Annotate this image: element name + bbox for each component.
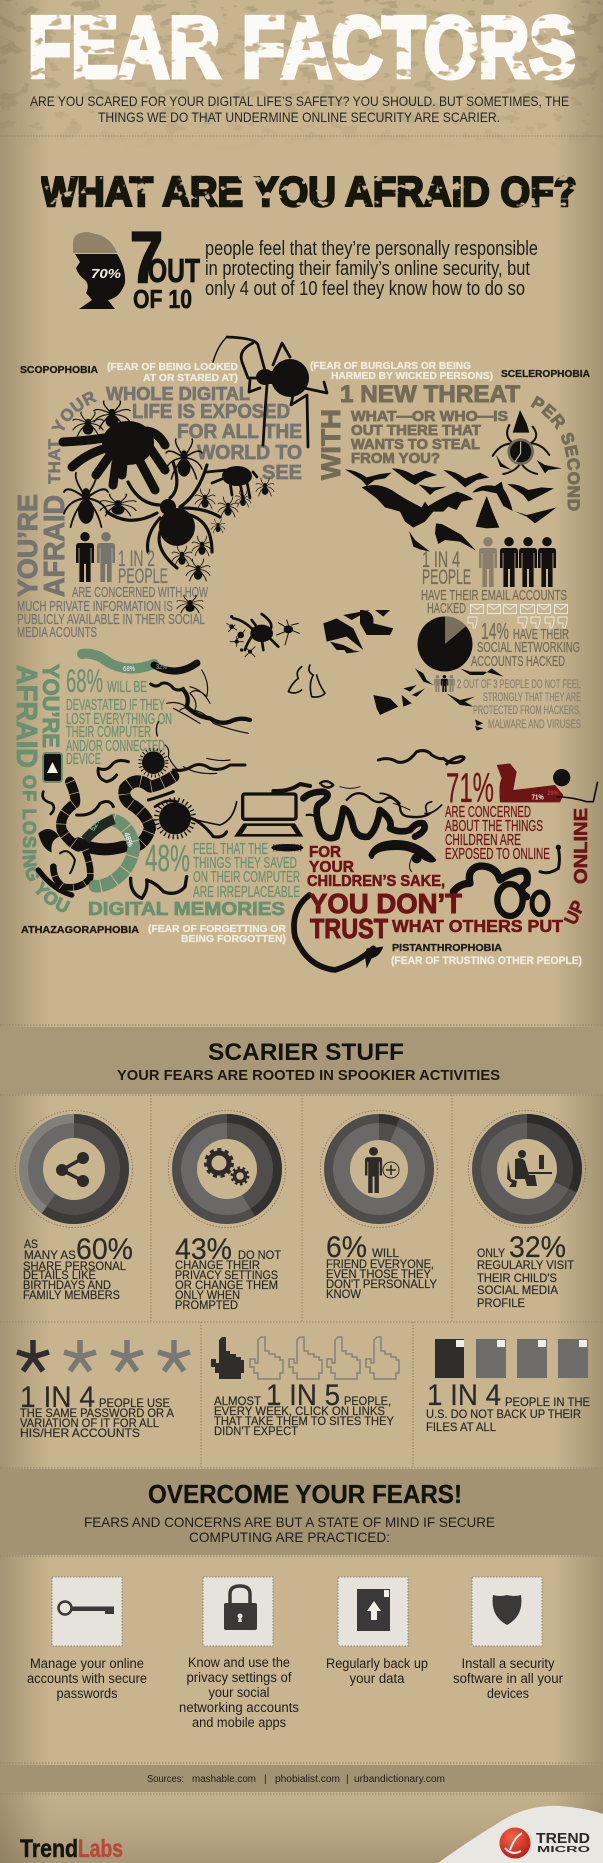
panel: pistanthrophobia <box>294 751 598 970</box>
statistic: email accounts hacked: 1 IN 4 <box>422 547 460 572</box>
heading: SCARIER STUFF <box>208 1039 404 1066</box>
bats <box>345 455 562 552</box>
small spiders <box>172 478 274 581</box>
statistic: 48%: ARE IRREPLACEABLE <box>193 884 300 901</box>
vertical headline: YOU’RE <box>12 494 43 597</box>
wordmark: MICRO <box>537 1845 590 1854</box>
eye: spider cluster <box>227 614 299 657</box>
panel: 1 in 5 click links <box>211 1337 399 1438</box>
statistic text <box>23 1233 133 1302</box>
phobia label <box>310 360 590 382</box>
panel: 7 out of 10 <box>73 218 538 314</box>
phobia label: (FEAR OF BURGLARS OR BEING <box>310 360 471 372</box>
statistic text: BIRTHDAYS AND <box>23 1278 111 1292</box>
tip: back up data <box>326 1577 428 1686</box>
tarantula <box>63 401 165 490</box>
source list: urbandictionary.com <box>354 1774 445 1785</box>
snakes <box>294 751 598 970</box>
subheading: COMPUTING ARE PRACTICED: <box>189 1529 390 1545</box>
icon: person at desk <box>507 1150 552 1187</box>
vertical headline: YOU’RE <box>38 664 64 748</box>
icon: key <box>52 1577 122 1646</box>
phobia label: SCOPOPHOBIA <box>20 364 98 376</box>
snake chart: 48% <box>85 815 136 886</box>
donut chart: 32% <box>468 1110 586 1228</box>
panel: scarier stuff header <box>0 1025 603 1095</box>
phobia label <box>21 923 286 945</box>
statistic text: WILL <box>372 1246 399 1260</box>
panel: 1 in 4 same password <box>17 1340 190 1440</box>
statistic: 48% <box>145 838 300 901</box>
statistic text: 1 IN 4 <box>20 1381 95 1414</box>
tip text: software in all your <box>453 1671 563 1686</box>
curved headline: WITH <box>316 409 346 480</box>
statistic text: AS <box>24 1237 38 1251</box>
subheading: FEARS AND CONCERNS ARE BUT A STATE OF MIND IF SECURE <box>84 1514 495 1530</box>
medium spiders <box>64 439 257 527</box>
statistic: 71% <box>445 764 550 863</box>
phobia label: PISTANTHROPHOBIA <box>392 942 502 954</box>
donut chart: 43% <box>168 1110 286 1228</box>
statistic text: MANY AS <box>24 1248 76 1262</box>
headline: you don't trust: UP <box>560 897 589 928</box>
headline: you don't trust: ONLINE <box>570 808 591 884</box>
tip text <box>27 1656 147 1701</box>
statistic text: REGULARLY VISIT <box>477 1258 575 1272</box>
source list: mashable.com <box>192 1774 256 1785</box>
vertical headline: DIGITAL MEMORIES <box>88 899 285 919</box>
phobia label: (FEAR OF FORGETTING OR <box>148 923 286 935</box>
people icons: 2 out of 3 <box>434 675 455 692</box>
statistic: 71%: 71% <box>446 764 494 811</box>
statistic text: FRIEND EVERYONE, <box>326 1257 434 1271</box>
source list <box>147 1774 445 1785</box>
statistic 7 out of 10: OUT <box>148 252 200 289</box>
subheading: YOUR FEARS ARE ROOTED IN SPOOKIER ACTIVITIES <box>117 1067 500 1084</box>
statistic text: VARIATION OF IT FOR ALL <box>20 1416 159 1430</box>
tip: secure passwords <box>27 1577 147 1701</box>
statistic: social accounts hacked <box>471 618 580 670</box>
statistic text: 60% <box>76 1233 133 1266</box>
statistic: 48%: FEEL THAT THE <box>193 841 268 858</box>
vertical headline: AFRAID <box>10 665 42 768</box>
snakes and worms <box>38 670 310 898</box>
statistic text: THEIR CHILD'S <box>477 1271 557 1285</box>
question text <box>351 408 508 467</box>
tip text: Regularly back up <box>326 1656 428 1671</box>
bats and biohazard clock <box>345 410 562 552</box>
statistic text: DIDN'T EXPECT <box>214 1424 299 1438</box>
statistic: 1 in 2 people: ARE CONCERNED WITH HOW <box>72 585 208 601</box>
intro text: THINGS WE DO THAT UNDERMINE ONLINE SECURITY ARE SCARIER. <box>98 109 500 125</box>
eye: bat cluster <box>323 610 393 653</box>
statistic text <box>214 1379 394 1438</box>
tip text <box>453 1656 563 1701</box>
statistic text: FAMILY MEMBERS <box>23 1288 120 1302</box>
phobia label <box>391 942 582 967</box>
icon: laptop <box>234 784 310 837</box>
statistic text <box>426 1379 590 1434</box>
hanging spider <box>213 337 327 447</box>
statistic text: OR CHANGE THEM <box>175 1278 278 1292</box>
phobia label <box>20 361 238 384</box>
snake chart: 48%: 48% <box>122 831 136 848</box>
blob worm head <box>38 829 59 853</box>
snake chart: 68%: 68% <box>123 666 135 673</box>
statistic text <box>175 1233 282 1312</box>
statistic text: 43% <box>175 1233 232 1266</box>
statistic text: ONLY <box>477 1246 505 1260</box>
icons: documents <box>435 1339 588 1378</box>
headline: you don't trust: WHAT OTHERS PUT <box>392 916 563 936</box>
statistic: 2 out of 3 <box>457 677 581 731</box>
phobia label: AT OR STARED AT) <box>143 372 238 384</box>
logo: Trend Micro <box>438 1806 603 1863</box>
statistic: 71%: CHILDREN ARE <box>445 832 521 849</box>
panel: 32% visit child's profile <box>468 1110 586 1310</box>
icon: man carrying bag: 70% <box>91 266 121 281</box>
statistic text: PEOPLE IN THE <box>505 1395 590 1409</box>
statistic text: PEOPLE USE <box>99 1396 170 1410</box>
icon: child lying with laptop: 29% <box>547 790 559 797</box>
statistic: 1 in 2 people: PUBLICLY AVAILABLE IN THEIR SOCIAL <box>17 612 205 628</box>
logo: TrendLabs <box>20 1835 123 1863</box>
statistic text: CHANGE THEIR <box>175 1258 260 1272</box>
statistic text: 1 IN 5 <box>266 1379 340 1412</box>
statistic description: people feel that they’re personally responsible <box>205 238 538 260</box>
title: FEAR <box>28 0 220 96</box>
icon: man carrying bag <box>73 232 125 309</box>
icons: pointer hands <box>211 1337 399 1379</box>
heading: OVERCOME YOUR FEARS! <box>148 1479 462 1509</box>
source list: | <box>264 1774 267 1785</box>
snake chart: 68%: 32% <box>156 664 167 671</box>
curved headline: SEE <box>262 461 302 484</box>
donut chart: 6% <box>320 1110 438 1228</box>
skull face: central creature clusters <box>227 610 503 731</box>
pie chart: 14% <box>418 616 472 672</box>
question text: FROM YOU? <box>351 450 440 467</box>
wordmark: TREND <box>536 1830 590 1847</box>
source list: Sources: <box>147 1774 184 1785</box>
phobia label: ATHAZAGORAPHOBIA <box>21 924 139 936</box>
statistic: 68% <box>66 663 172 768</box>
panel: 43% do not change privacy <box>168 1110 286 1312</box>
statistic: 68%: THEIR COMPUTER <box>66 724 151 741</box>
panel: 60% share personal details <box>16 1110 133 1302</box>
icons: envelopes <box>470 604 568 614</box>
icon: share <box>56 1152 88 1186</box>
statistic text: THAT TAKE THEM TO SITES THEY <box>214 1414 394 1428</box>
statistic: 1 in 2 people <box>17 546 208 641</box>
icon: caterpillar <box>271 844 303 851</box>
icon: add friend <box>365 1147 399 1193</box>
statistic: 68%: AND/OR CONNECTED <box>66 738 165 755</box>
tip text: Know and use the <box>188 1655 290 1670</box>
question text: WHAT—OR WHO—IS <box>351 408 508 425</box>
statistic: 68%: WILL BE <box>107 679 147 696</box>
statistic 7 out of 10: 7 <box>130 218 163 298</box>
statistic: 1 in 2 people: MUCH PRIVATE INFORMATION IS <box>17 599 173 615</box>
nose: snake cluster <box>288 665 325 697</box>
tip text <box>326 1656 428 1686</box>
headline: you don't trust: CHILDREN’S SAKE, <box>307 873 445 890</box>
curved headline: PER SECOND <box>530 396 580 511</box>
segmented worms <box>38 777 187 898</box>
statistic: 1 in 2 people: PEOPLE <box>118 565 168 588</box>
curved headline: WHOLE DIGITAL <box>106 383 250 404</box>
statistic: email accounts hacked: HACKED <box>427 600 466 617</box>
statistic text: HIS/HER ACCOUNTS <box>20 1426 140 1440</box>
donut chart: 60% <box>16 1110 132 1228</box>
panel: overcome your fears header <box>0 1469 603 1556</box>
statistic description <box>205 238 538 300</box>
statistic text: PROFILE <box>477 1296 525 1310</box>
statistic: 48%: THINGS THEY SAVED <box>193 855 297 872</box>
tip text: privacy settings of <box>186 1670 292 1685</box>
snake chart: 48%: 52% <box>88 815 103 833</box>
statistic text: 1 IN 4 <box>427 1379 501 1412</box>
statistic text: SOCIAL MEDIA <box>477 1283 558 1297</box>
curved headline <box>48 383 302 484</box>
statistic: 68%: DEVICE <box>66 751 101 768</box>
statistic: 1 in 2 people: 1 IN 2 <box>118 546 155 571</box>
panel: scopophobia <box>12 336 328 641</box>
logo: TrendLabs: Labs <box>78 1835 123 1863</box>
icon: gears <box>206 1150 248 1184</box>
logo: TrendLabs: Trend <box>20 1835 78 1863</box>
statistic text: ALMOST <box>214 1394 262 1408</box>
sources band <box>0 1763 603 1794</box>
panel: athazagoraphobia <box>10 648 312 945</box>
intro text <box>30 93 569 125</box>
spiders <box>63 337 327 581</box>
widow spider <box>107 462 220 568</box>
statistic: 48%: ON THEIR COMPUTER <box>193 869 300 886</box>
icons: thumbs down <box>468 617 567 628</box>
statistic: 71%: ABOUT THE THINGS <box>445 818 543 835</box>
statistic 7 out of 10 <box>130 218 200 314</box>
tip text: accounts with secure <box>27 1671 147 1686</box>
statistic text: DO NOT <box>238 1248 282 1262</box>
curved headline: WORLD TO <box>197 441 302 464</box>
headline: you don't trust: YOU DON’T <box>309 888 462 919</box>
statistic text: ONLY WHEN <box>175 1288 240 1302</box>
statistic text: DETAILS LIKE <box>23 1268 96 1282</box>
statistic description: in protecting their family’s online security, but <box>205 258 530 280</box>
curved headline: FOR ALL THE <box>177 420 302 443</box>
icon: small spider <box>177 595 203 613</box>
headline: you don't trust: FOR <box>309 844 341 861</box>
tip text: Manage your online <box>30 1656 144 1671</box>
statistic description: only 4 out of 10 feel they know how to do so <box>205 278 525 300</box>
statistic: 68%: LOST EVERYTHING ON <box>66 711 172 728</box>
icon: shield <box>472 1577 542 1646</box>
question text: OUT THERE THAT <box>351 422 481 439</box>
statistic text <box>477 1231 575 1310</box>
panel: 1 in 4 no backup <box>426 1339 590 1434</box>
icons: asterisks <box>17 1340 190 1371</box>
people icons: 1 in 4 <box>479 537 556 587</box>
title <box>28 0 576 96</box>
statistic: email accounts hacked: PEOPLE <box>422 566 471 589</box>
statistic text: PROMPTED <box>175 1298 238 1312</box>
statistic text: THE SAME PASSWORD OR A <box>20 1406 174 1420</box>
statistic text: EVEN THOSE THEY <box>326 1267 431 1281</box>
source list: phobialist.com <box>275 1774 340 1785</box>
statistic: 1 in 2 people: MEDIA ACOUNTS <box>17 625 97 641</box>
vertical headline <box>10 664 285 919</box>
statistic: 48%: 48% <box>145 838 190 880</box>
source list: | <box>346 1774 349 1785</box>
statistic text: U.S. DO NOT BACK UP THEIR <box>426 1407 581 1421</box>
tip text: devices <box>487 1686 529 1701</box>
statistic: 71%: ARE CONCERNED <box>445 804 531 821</box>
statistic text: 6% <box>326 1231 367 1264</box>
statistic text: KNOW <box>326 1287 362 1301</box>
statistic text: DON'T PERSONALLY <box>326 1277 437 1291</box>
wordmark <box>536 1830 590 1854</box>
statistic 7 out of 10: OF 10 <box>133 284 192 314</box>
headline: you don't trust: TRUST <box>310 913 388 944</box>
curved headline <box>316 381 580 511</box>
thin snakes <box>43 670 250 873</box>
statistic text <box>326 1231 437 1301</box>
icon: warning device <box>43 753 62 782</box>
headline: you don't trust <box>307 808 591 944</box>
phobia label: SCELEROPHOBIA <box>501 368 590 380</box>
statistic text: 32% <box>509 1231 566 1264</box>
phobia label: (FEAR OF BEING LOOKED <box>107 361 238 373</box>
panel: scelerophobia <box>310 360 590 731</box>
statistic text: EVERY WEEK, CLICK ON LINKS <box>214 1404 385 1418</box>
statistic text: PRIVACY SETTINGS <box>175 1268 278 1282</box>
icon: padlock <box>203 1577 273 1646</box>
icon: child lying with laptop <box>497 763 598 802</box>
question text: WANTS TO STEAL <box>351 436 480 453</box>
tip text <box>179 1655 299 1730</box>
statistic: 68%: 68% <box>66 663 103 699</box>
tip text: passwords <box>56 1686 118 1701</box>
curved headline: THAT YOUR <box>48 392 98 484</box>
people icons: 1 in 2 <box>76 532 115 582</box>
statistic: social accounts hacked: HAVE THEIR <box>513 626 569 643</box>
icons: spiky viruses <box>140 749 194 837</box>
small bats <box>373 668 503 731</box>
statistic: email accounts hacked <box>421 547 567 617</box>
icon: child lying with laptop: 71% <box>532 792 544 801</box>
phobia label: HARMED BY WICKED PERSONS) <box>331 370 493 382</box>
statistic text: PEOPLE, <box>344 1394 391 1408</box>
icon: biohazard clock <box>493 410 549 474</box>
tip text: networking accounts <box>179 1700 299 1715</box>
tip text: Install a security <box>462 1656 555 1671</box>
snake chart: 68% <box>82 654 197 673</box>
tip text: your data <box>350 1671 405 1686</box>
tip text: your social <box>208 1685 270 1700</box>
icon: red ball <box>500 1828 530 1858</box>
curved headline: 1 NEW THREAT <box>340 381 520 408</box>
statistic text <box>20 1381 174 1440</box>
tip text: and mobile apps <box>192 1715 286 1730</box>
headline: you don't trust: YOUR <box>309 859 354 876</box>
phobia label: (FEAR OF TRUSTING OTHER PEOPLE) <box>391 955 582 967</box>
icon: backup document <box>338 1577 408 1646</box>
curved headline: LIFE IS EXPOSED <box>132 400 290 423</box>
statistic text: SHARE PERSONAL <box>23 1259 126 1273</box>
subheading <box>84 1514 495 1545</box>
statistic text: FILES AT ALL <box>426 1420 496 1434</box>
phobia label: BEING FORGOTTEN) <box>181 933 286 945</box>
statistic: social accounts hacked: 14% <box>481 618 509 644</box>
vertical headline <box>12 494 71 597</box>
panel: 6% friend everyone <box>320 1110 438 1301</box>
tip: privacy settings <box>179 1577 299 1730</box>
statistic: 68%: DEVASTATED IF THEY <box>66 697 165 714</box>
vertical headline: AFRAID <box>39 495 71 597</box>
tip: security software <box>453 1577 563 1701</box>
